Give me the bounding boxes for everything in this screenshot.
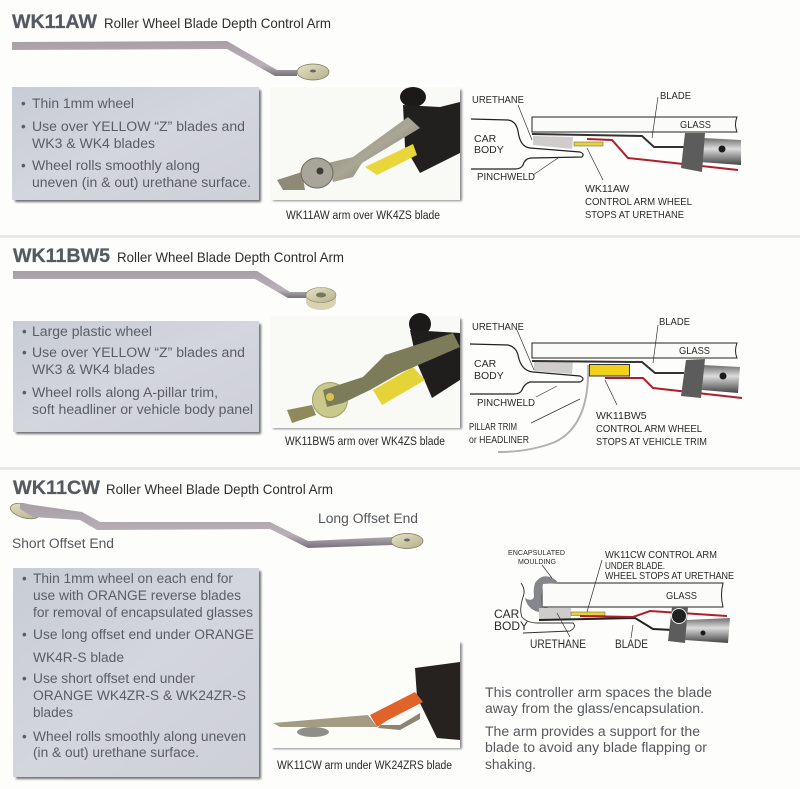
text block: controller arm explanation (485, 685, 712, 772)
diagram: WK11CW cross-section: MOULDING (518, 557, 556, 566)
diagram: WK11BW5 cross-section: BODY (474, 370, 504, 382)
caption: WK11AW photo: WK11AW arm over WK4ZS blade (286, 210, 440, 222)
diagram: WK11BW5 cross-section: PILLAR TRIM (469, 421, 517, 433)
panel: WK11AW features: • (21, 158, 26, 173)
panel: WK11BW5 features: Large plastic wheel (32, 324, 152, 339)
heading: WK11CW: WK11CW (13, 477, 101, 499)
panel: WK11AW features: • (21, 119, 26, 134)
panel: WK11AW features: Thin 1mm wheel (32, 96, 134, 111)
heading: WK11BW5: Roller Wheel Blade Depth Control Arm (117, 249, 344, 265)
panel: WK11CW features: blades (33, 705, 73, 720)
panel: WK11CW features: Thin 1mm wheel on each end for (33, 571, 234, 586)
heading: WK11BW5 (13, 245, 344, 267)
arm illustration: WK11AW (12, 41, 329, 80)
diagram: WK11BW5 cross-section (469, 316, 742, 452)
section: WK11BW5 (13, 245, 742, 452)
diagram: WK11CW cross-section: GLASS (666, 590, 697, 602)
text block: controller arm explanation: The arm provides a support for the (485, 724, 700, 739)
text block: controller arm explanation: This controller arm spaces the blade (485, 685, 712, 700)
diagram: WK11AW cross-section: BODY (474, 144, 504, 156)
arm illustration: WK11BW5 (13, 271, 336, 310)
diagram: WK11AW cross-section: GLASS (680, 119, 711, 131)
diagram: WK11BW5 cross-section: or HEADLINER (469, 434, 529, 446)
panel: WK11CW features: ORANGE WK4ZR-S & WK24ZR-S (33, 688, 246, 703)
panel: WK11AW features (12, 87, 261, 202)
diagram: WK11AW cross-section: PINCHWELD (477, 171, 535, 183)
section: WK11AW (12, 11, 741, 222)
diagram: WK11AW cross-section: WK11AW (585, 183, 629, 195)
heading: WK11BW5: WK11BW5 (13, 245, 110, 267)
panel: WK11BW5 features: soft headliner or vehicle body panel (32, 402, 253, 417)
diagram: WK11CW cross-section: URETHANE (530, 639, 586, 651)
panel: WK11CW features (13, 568, 261, 779)
photo: WK11CW arm under WK24ZRS blade (270, 640, 462, 749)
diagram: WK11BW5 cross-section: URETHANE (472, 321, 524, 333)
diagram: WK11CW cross-section (494, 548, 734, 651)
diagram: WK11CW cross-section: WK11CW CONTROL ARM (605, 549, 717, 561)
text block: controller arm explanation: blade to avoid any blade flapping or (485, 740, 708, 755)
diagram: WK11BW5 cross-section: CAR (474, 358, 497, 370)
diagram: WK11BW5 cross-section: STOPS AT VEHICLE TRIM (596, 436, 707, 448)
panel: WK11CW features: (in & out) urethane surface. (33, 745, 199, 760)
caption: WK11BW5 photo: WK11BW5 arm over WK4ZS blade (285, 436, 445, 448)
photo: WK11BW5 arm over WK4ZS blade (270, 313, 462, 429)
panel: WK11BW5 features: Wheel rolls along A-pillar trim, (32, 385, 218, 400)
diagram: WK11CW cross-section: BLADE (615, 639, 648, 651)
panel: WK11BW5 features (13, 321, 261, 434)
panel: WK11CW features: • (22, 627, 27, 642)
panel: WK11CW features: for removal of encapsulated glasses (33, 605, 253, 620)
heading: WK11CW: Roller Wheel Blade Depth Control Arm (106, 481, 333, 497)
section: WK11CW (9, 477, 734, 779)
heading: WK11AW (12, 11, 331, 33)
panel: WK11CW features: • (22, 671, 27, 686)
diagram: WK11BW5 cross-section: CONTROL ARM WHEEL (596, 423, 702, 435)
heading: WK11AW: Roller Wheel Blade Depth Control Arm (104, 15, 331, 31)
diagram: WK11AW cross-section: URETHANE (472, 94, 524, 106)
panel: WK11AW features: Wheel rolls smoothly along (32, 158, 200, 173)
panel: WK11CW features: WK4R-S blade (33, 650, 124, 665)
heading: WK11AW: WK11AW (12, 11, 98, 33)
diagram: WK11BW5 cross-section: GLASS (679, 345, 710, 357)
diagram: WK11BW5 cross-section: WK11BW5 (596, 410, 647, 422)
diagram: WK11CW cross-section: UNDER BLADE. (605, 560, 665, 572)
panel: WK11BW5 features: • (22, 345, 27, 360)
caption: WK11CW photo: WK11CW arm under WK24ZRS blade (277, 760, 452, 772)
text block: controller arm explanation: shaking. (485, 757, 536, 772)
text block: controller arm explanation: away from the glass/encapsulation. (485, 701, 704, 716)
diagram: WK11CW cross-section: WHEEL STOPS AT URETHANE (605, 570, 734, 582)
diagram: WK11CW cross-section: ENCAPSULATED (508, 548, 566, 557)
photo: WK11AW arm over WK4ZS blade (270, 87, 462, 201)
panel: WK11AW features: uneven (in & out) urethane surface. (32, 175, 251, 190)
panel: WK11BW5 features: WK3 & WK4 blades (32, 362, 155, 377)
diagram: WK11AW cross-section: BLADE (660, 90, 691, 102)
panel: WK11BW5 features: • (22, 385, 27, 400)
label: long offset end: Long Offset End (318, 511, 418, 526)
diagram: WK11BW5 cross-section: PINCHWELD (477, 397, 535, 409)
arm illustration: WK11CW double ended (9, 500, 423, 548)
diagram: WK11AW cross-section (471, 90, 741, 221)
panel: WK11AW features: Use over YELLOW “Z” blades and (32, 119, 245, 134)
panel: WK11CW features: Wheel rolls smoothly along uneven (33, 729, 246, 744)
panel: WK11BW5 features: Use over YELLOW “Z” blades and (32, 345, 245, 360)
panel: WK11BW5 features: • (22, 324, 27, 339)
panel: WK11CW features: Use long offset end under ORANGE (33, 627, 254, 642)
panel: WK11AW features: WK3 & WK4 blades (32, 136, 155, 151)
label: short offset end: Short Offset End (12, 536, 114, 551)
diagram: WK11BW5 cross-section: BLADE (659, 316, 690, 328)
panel: WK11CW features: • (22, 729, 27, 744)
panel: WK11CW features: Use short offset end under (33, 671, 196, 686)
panel: WK11CW features: use with ORANGE reverse blades (33, 588, 241, 603)
panel: WK11CW features: • (22, 571, 27, 586)
diagram: WK11CW cross-section: CAR (494, 607, 520, 621)
panel: WK11AW features: • (21, 96, 26, 111)
heading: WK11CW (13, 477, 333, 499)
diagram: WK11AW cross-section: STOPS AT URETHANE (585, 209, 684, 221)
diagram: WK11CW cross-section: BODY (494, 619, 528, 633)
diagram: WK11AW cross-section: CAR (474, 133, 497, 145)
diagram: WK11AW cross-section: CONTROL ARM WHEEL (585, 196, 692, 208)
